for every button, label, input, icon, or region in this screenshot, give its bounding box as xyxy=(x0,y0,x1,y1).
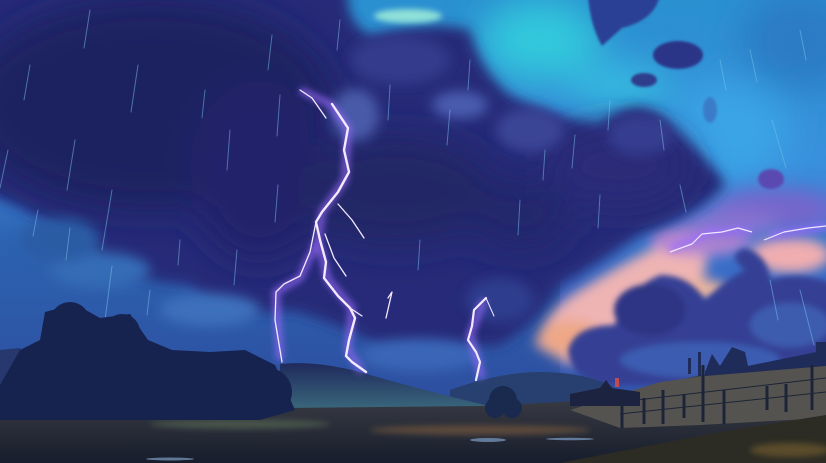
distant hills xyxy=(0,348,640,420)
lighter cloud lobes xyxy=(20,36,672,371)
lower right cumulus xyxy=(568,248,826,385)
bright cyan sky glow xyxy=(480,0,826,180)
small center tree xyxy=(485,386,522,418)
right hillside xyxy=(570,360,826,428)
small floating clouds xyxy=(588,0,784,189)
meadow ground xyxy=(0,358,826,463)
foreground grass xyxy=(560,415,826,463)
fence xyxy=(620,365,826,428)
left tree cluster xyxy=(0,302,295,420)
lightning glow xyxy=(276,90,826,378)
distant ruins on ridge xyxy=(688,342,826,376)
ground warm tints xyxy=(150,419,826,457)
farmhouse xyxy=(570,378,640,406)
sunset glow xyxy=(535,224,826,365)
cloud top highlight xyxy=(374,9,442,23)
main lightning bolt xyxy=(275,90,392,372)
secondary lightning bolt xyxy=(468,298,494,380)
lower-left blue haze xyxy=(0,170,560,420)
puddles xyxy=(146,438,594,460)
distant horizontal lightning xyxy=(670,226,826,252)
dark cloud core xyxy=(0,0,690,260)
main storm cloud mass xyxy=(0,0,725,348)
